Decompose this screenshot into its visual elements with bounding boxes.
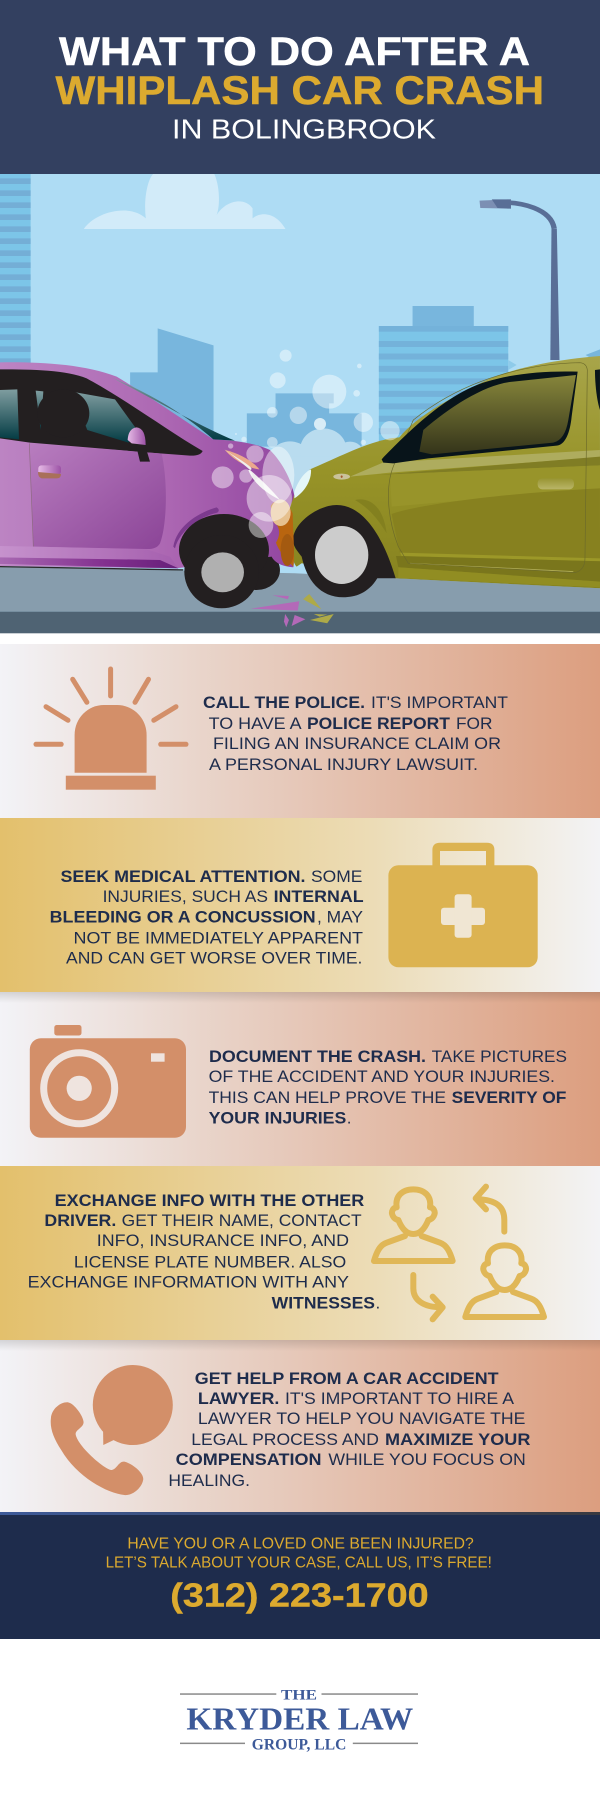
text: exchange info: EXCHANGE INFORMATION WITH ANY — [28, 1272, 349, 1291]
panel: seek medical attention — [0, 818, 600, 992]
text: seek medical attention: SOME — [311, 867, 362, 886]
icon: siren — [36, 669, 186, 790]
icon: phone with speech bubble — [51, 1365, 173, 1495]
text: get legal help: IT'S IMPORTANT TO HIRE A — [285, 1389, 515, 1408]
crash damage and smoke — [212, 350, 294, 567]
text: seek medical attention: INTERNAL — [274, 887, 364, 906]
arrow up-left — [476, 1187, 504, 1232]
text: exchange info: . — [376, 1293, 380, 1312]
text: get legal help: LAWYER. — [198, 1389, 279, 1408]
text: call the police: A PERSONAL INJURY LAWSUIT. — [209, 755, 478, 774]
text: exchange info: GET THEIR NAME, CONTACT — [122, 1211, 362, 1230]
road — [0, 567, 600, 612]
header band — [0, 0, 600, 174]
call to action text: HAVE YOU OR A LOVED ONE BEEN INJURED? — [127, 1535, 474, 1552]
call to action band — [0, 1512, 600, 1639]
illustration: car crash scene — [0, 174, 600, 633]
text: document the crash: YOUR INJURIES — [209, 1108, 346, 1127]
title: WHAT TO DO AFTER A — [59, 30, 530, 74]
call to action text: LET’S TALK ABOUT YOUR CASE, CALL US, IT’S FREE! — [106, 1554, 492, 1571]
debris — [251, 594, 334, 627]
text: exchange info: WITNESSES — [272, 1293, 375, 1312]
olive car — [288, 356, 600, 597]
text: call the police: CALL THE POLICE. — [203, 693, 365, 712]
text: get legal help: GET HELP FROM A CAR ACCIDENT — [195, 1369, 499, 1388]
text: document the crash — [209, 1047, 567, 1127]
text: call the police: TO HAVE A — [209, 714, 302, 733]
smoke cloud behind cars — [266, 418, 363, 500]
door panel — [29, 443, 166, 549]
purple car — [0, 362, 295, 608]
title — [56, 30, 544, 145]
icon: first aid kit — [388, 843, 538, 967]
text: seek medical attention: INJURIES, SUCH AS — [103, 887, 268, 906]
arrow down-right — [413, 1275, 443, 1319]
phone number: (312) 223-1700 — [170, 1577, 429, 1614]
panel: exchange info — [0, 1166, 600, 1340]
text: seek medical attention: SEEK MEDICAL ATTENTION. — [60, 867, 306, 886]
text: get legal help — [168, 1369, 530, 1490]
cloud — [84, 174, 285, 229]
icon: camera — [30, 1025, 186, 1138]
text: exchange info: EXCHANGE INFO WITH THE OTHER — [55, 1191, 364, 1210]
text: exchange info — [28, 1191, 380, 1312]
logo: the kryder law group: THE — [281, 1687, 317, 1703]
text: get legal help: LEGAL PROCESS AND — [191, 1430, 379, 1449]
text: get legal help: COMPENSATION — [176, 1450, 322, 1469]
left striped building — [0, 174, 31, 364]
panel: call the police — [0, 644, 600, 818]
panel: get legal help — [0, 1340, 600, 1512]
street lamp — [480, 199, 560, 360]
text: exchange info: DRIVER. — [44, 1211, 116, 1230]
text: seek medical attention: AND CAN GET WORSE OVER TIME. — [66, 948, 362, 967]
panel: document the crash — [0, 992, 600, 1166]
text: get legal help: HEALING. — [168, 1471, 250, 1490]
text: call the police — [203, 693, 508, 774]
side window — [382, 371, 578, 463]
text: seek medical attention — [50, 867, 364, 967]
text: document the crash: DOCUMENT THE CRASH. — [209, 1047, 426, 1066]
title: IN BOLINGBROOK — [172, 114, 436, 145]
text: document the crash: OF THE ACCIDENT AND YOUR INJURIES. — [209, 1067, 555, 1086]
right striped building — [379, 306, 600, 446]
text: call the police: FOR — [456, 714, 492, 733]
centre buildings — [130, 328, 362, 447]
text: document the crash: . — [347, 1108, 352, 1127]
smoke bubbles — [290, 364, 400, 445]
person two — [465, 1245, 544, 1317]
person one — [374, 1189, 453, 1261]
title: WHIPLASH CAR CRASH — [56, 69, 544, 113]
text: get legal help: WHILE YOU FOCUS ON — [328, 1450, 526, 1469]
text: document the crash: TAKE PICTURES — [432, 1047, 567, 1066]
logo: the kryder law group: GROUP, LLC — [252, 1736, 346, 1753]
text: get legal help: LAWYER TO HELP YOU NAVIGATE THE — [198, 1409, 525, 1428]
text: seek medical attention: BLEEDING OR A CONCUSSION — [50, 907, 316, 926]
text: call the police: IT'S IMPORTANT — [371, 693, 508, 712]
text: document the crash: THIS CAN HELP PROVE THE — [209, 1088, 446, 1107]
door handle — [38, 465, 61, 478]
icon: two people exchanging — [374, 1187, 544, 1319]
text: document the crash: SEVERITY OF — [452, 1088, 566, 1107]
text: exchange info: LICENSE PLATE NUMBER. ALSO — [74, 1252, 346, 1271]
call to action text — [106, 1535, 492, 1571]
kerb — [0, 612, 600, 633]
text: seek medical attention: , MAY — [317, 907, 363, 926]
logo: the kryder law group — [180, 1687, 418, 1753]
logo: the kryder law group: KRYDER LAW — [186, 1700, 413, 1736]
text: get legal help: MAXIMIZE YOUR — [385, 1430, 530, 1449]
text: call the police: FILING AN INSURANCE CLAIM OR — [213, 734, 501, 753]
text: exchange info: INFO, INSURANCE INFO, AND — [97, 1231, 349, 1250]
text: call the police: POLICE REPORT — [307, 714, 451, 733]
text: seek medical attention: NOT BE IMMEDIATELY APPARENT — [74, 928, 363, 947]
